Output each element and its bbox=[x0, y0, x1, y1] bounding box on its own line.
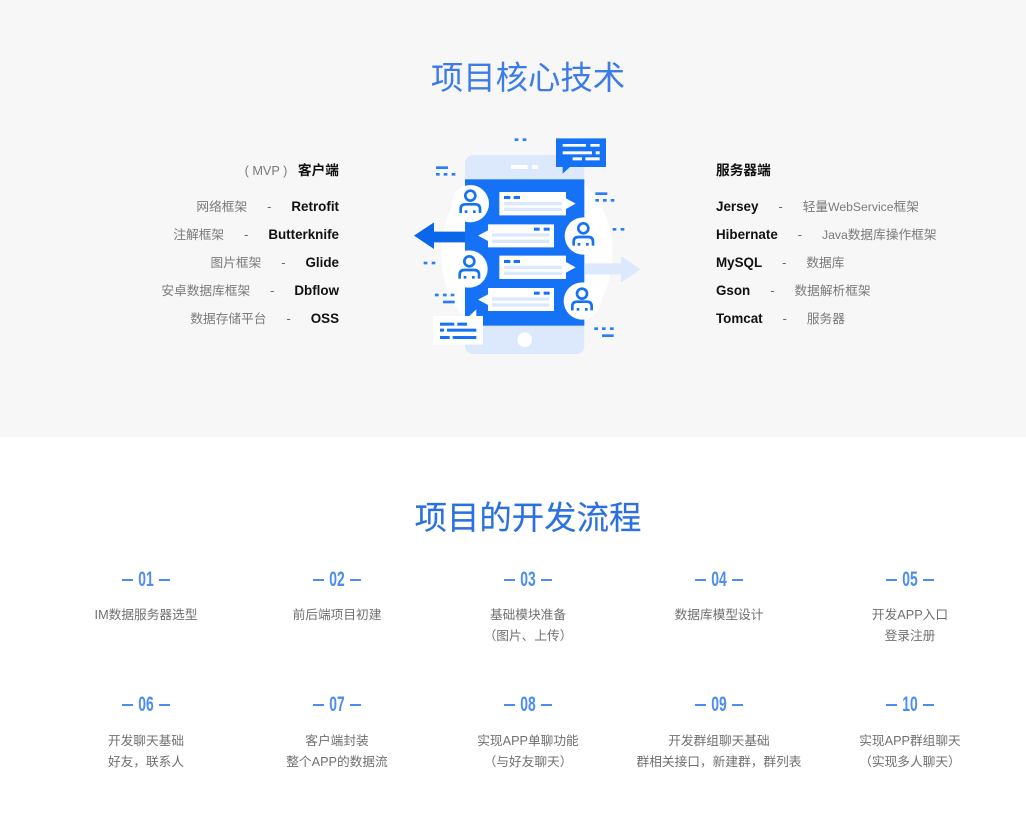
server row: Hibernate: - bbox=[798, 228, 802, 242]
title: core technology: 项目核心技术 bbox=[431, 60, 625, 96]
step 05: 开发APP入口 bbox=[872, 608, 948, 622]
step 04: 04 bbox=[711, 568, 727, 591]
step 10: （实现多人聊天） bbox=[859, 755, 961, 769]
decorative dash clusters bbox=[424, 138, 624, 337]
illustration: phone chat bbox=[414, 138, 641, 354]
bubble: chat two bbox=[478, 224, 554, 247]
step 05: 登录注册 bbox=[885, 629, 935, 643]
step 01: IM数据服务器选型 bbox=[95, 608, 197, 622]
step 03: （图片、上传） bbox=[484, 629, 572, 643]
client heading: ( MVP ) 客户端 bbox=[245, 163, 339, 178]
icon: user four bbox=[564, 282, 601, 320]
step 01: 01 bbox=[138, 568, 154, 591]
step 07: 07 bbox=[329, 693, 345, 716]
server row: Jersey: - bbox=[778, 200, 783, 214]
server row: Tomcat: Tomcat 服务器 bbox=[716, 311, 845, 326]
arrow: left dark blue bbox=[414, 222, 465, 249]
server row: Jersey: Jersey 轻量WebService框架 bbox=[716, 199, 919, 214]
client row: Glide: 图片框架 Glide bbox=[211, 255, 339, 270]
icon: user one bbox=[452, 185, 489, 222]
server row: Hibernate: Hibernate Java数据库操作框架 bbox=[716, 227, 937, 242]
client row: OSS: - bbox=[286, 312, 291, 326]
client row: Retrofit: 网络框架 Retrofit bbox=[196, 199, 339, 214]
step 05 bbox=[872, 568, 948, 643]
step 05: 05 bbox=[902, 568, 918, 591]
step 10: 10 bbox=[902, 693, 918, 716]
step 07: 整个APP的数据流 bbox=[286, 755, 388, 769]
step 09: 09 bbox=[711, 693, 727, 716]
step 09: 开发群组聊天基础 bbox=[668, 734, 770, 748]
step 08 bbox=[477, 693, 579, 769]
step 08: 08 bbox=[520, 693, 536, 716]
step 04: 数据库模型设计 bbox=[675, 608, 763, 622]
server heading: 服务器端 bbox=[716, 163, 771, 178]
client row: OSS: 数据存储平台 OSS bbox=[190, 311, 339, 326]
step 03 bbox=[484, 568, 572, 643]
step 06: 好友，联系人 bbox=[108, 755, 184, 769]
server row: MySQL: MySQL 数据库 bbox=[716, 255, 844, 270]
step 06 bbox=[108, 693, 184, 769]
step 08: 实现APP单聊功能 bbox=[477, 734, 579, 748]
server row: MySQL: - bbox=[782, 256, 786, 270]
step 10: 实现APP群组聊天 bbox=[859, 734, 961, 748]
client row: Butterknife: 注解框架 Butterknife bbox=[173, 227, 339, 242]
step 08: （与好友聊天） bbox=[484, 755, 572, 769]
bubble: chat three bbox=[499, 256, 576, 279]
bubble: chat one bbox=[499, 192, 576, 215]
step 02: 前后端项目初建 bbox=[293, 608, 381, 622]
arrow: right light blue bbox=[584, 256, 641, 283]
step 07: 客户端封装 bbox=[305, 734, 369, 748]
step 07 bbox=[286, 693, 388, 769]
step 09: 群相关接口，新建群，群列表 bbox=[637, 755, 801, 769]
client row: Retrofit: - bbox=[267, 200, 271, 214]
client row: Glide: - bbox=[281, 256, 286, 270]
step 03: 基础模块准备 bbox=[490, 608, 566, 622]
step 01 bbox=[95, 568, 197, 622]
title: development process: 项目的开发流程 bbox=[415, 500, 641, 536]
step 03: 03 bbox=[520, 568, 536, 591]
client row: Dbflow: - bbox=[270, 284, 274, 298]
bubble: top right message bbox=[556, 138, 606, 174]
panel: server technology list bbox=[716, 163, 937, 326]
client row: Butterknife: - bbox=[244, 228, 248, 242]
step 02 bbox=[293, 568, 381, 622]
icon: phone body bbox=[465, 155, 584, 354]
panel: core technology background bbox=[0, 0, 1026, 437]
icon: user two bbox=[565, 217, 602, 255]
step 04 bbox=[675, 568, 763, 622]
server row: Tomcat: - bbox=[783, 312, 787, 326]
server row: Gson: - bbox=[770, 284, 774, 298]
client row: Dbflow: 安卓数据库框架 Dbflow bbox=[161, 283, 339, 298]
step 09 bbox=[636, 693, 801, 769]
step 06: 开发聊天基础 bbox=[108, 734, 184, 748]
server row: Gson: Gson 数据解析框架 bbox=[716, 283, 871, 298]
panel: client technology list bbox=[161, 163, 339, 326]
icon: user three bbox=[450, 250, 488, 288]
step 06: 06 bbox=[138, 693, 154, 716]
step 10 bbox=[859, 693, 961, 769]
bubble: bottom left message bbox=[433, 309, 483, 345]
step 02: 02 bbox=[329, 568, 345, 591]
bubble: chat four bbox=[478, 288, 554, 311]
